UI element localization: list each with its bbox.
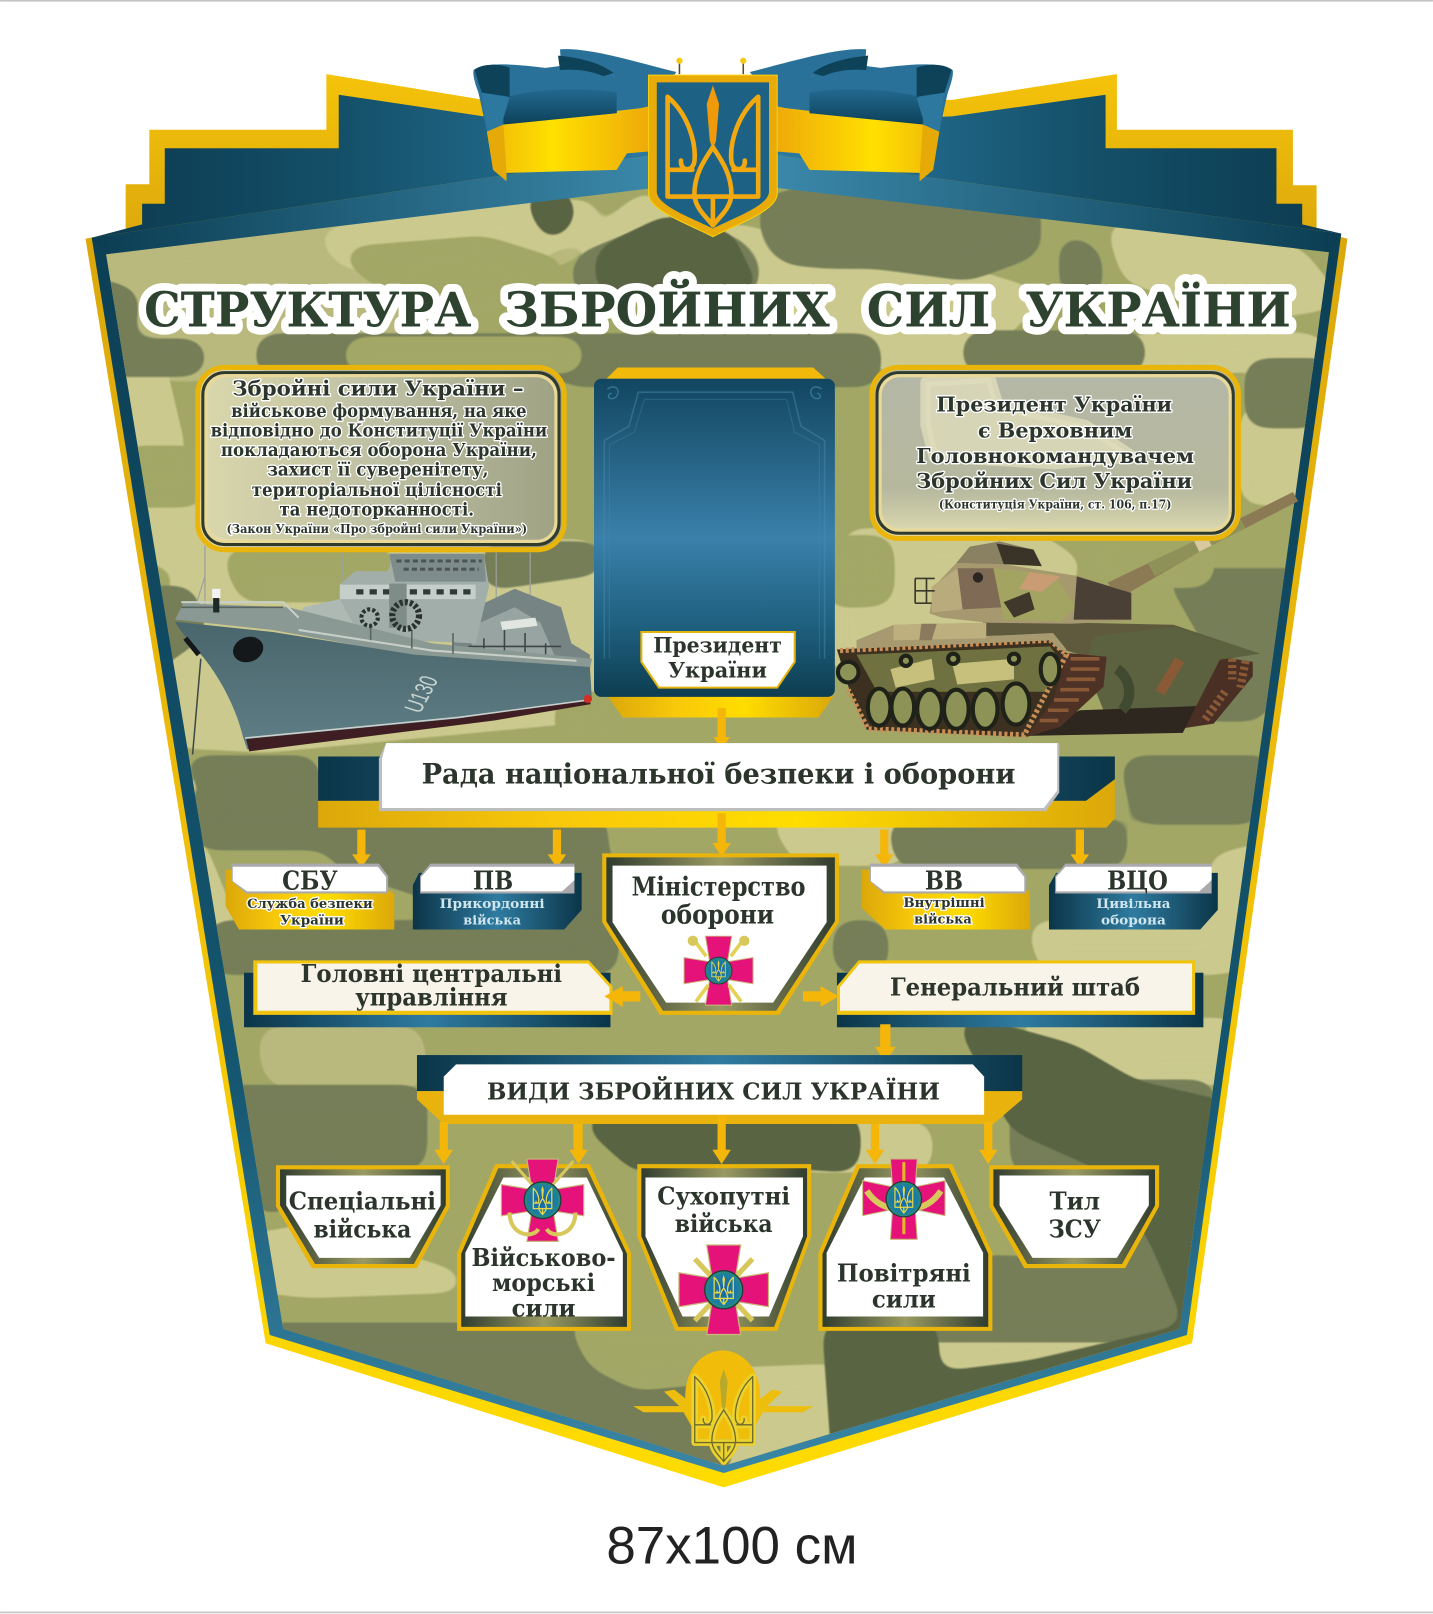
box: air force: Повітряні — [837, 1259, 971, 1288]
panel: president is commander in chief: є Верховним — [978, 418, 1132, 442]
ship main superstructure — [340, 554, 489, 643]
panel: armed forces definition: та недоторканності. — [280, 501, 474, 521]
title — [144, 279, 1291, 338]
box: ВЦО — [1049, 864, 1218, 929]
box: ВВ: Внутрішні — [903, 895, 985, 911]
icon: land forces cross — [679, 1245, 768, 1335]
tank cupola — [956, 541, 1042, 566]
shield of arms — [649, 75, 777, 237]
tank photo — [837, 492, 1298, 737]
council banner: Рада національної безпеки і оборони — [422, 757, 1016, 790]
panel: armed forces definition: (Закон України «Про збройні сили України») — [227, 522, 527, 536]
camouflage field — [88, 175, 1349, 1482]
banner: branches of the armed forces — [417, 1055, 1022, 1124]
box: logistics: Тил — [1049, 1186, 1100, 1215]
title: ЗБРОЙНИХ — [504, 279, 830, 338]
box: main central directorates — [244, 959, 613, 1027]
box: land forces: війська — [675, 1209, 773, 1238]
ship waterline — [246, 700, 591, 751]
panel: president — [594, 367, 835, 717]
panel: president is commander in chief: Президент України — [936, 393, 1172, 417]
tank wheels — [838, 654, 1059, 729]
ship deck — [175, 603, 592, 669]
panel: president is commander in chief — [872, 367, 1238, 538]
box: special forces — [276, 1165, 450, 1268]
icon: ministry cross — [684, 936, 753, 1005]
panel gold top — [606, 367, 826, 379]
box: general staff: Генеральний штаб — [890, 972, 1140, 1001]
box: ВЦО: оборона — [1101, 912, 1166, 928]
box: ministry of defence: Міністерство — [632, 873, 806, 903]
box: ВЦО: Цивільна — [1096, 896, 1171, 912]
council banner — [318, 743, 1115, 828]
finials — [679, 62, 743, 74]
panel: armed forces definition: покладаються оборона України, — [221, 441, 537, 461]
header fold strip right — [772, 154, 1341, 252]
arrow: ministry to general staff — [803, 986, 839, 1007]
box: special forces: Спеціальні — [289, 1186, 436, 1215]
arrows to branches — [434, 1116, 998, 1164]
arrow: ministry to directorates — [604, 986, 640, 1007]
tank turret — [930, 563, 1131, 624]
shield board — [86, 74, 1349, 1487]
box: air force: сили — [872, 1284, 936, 1313]
box: ПВ: війська — [463, 912, 521, 928]
panel: president is commander in chief: Збройних Сил України — [916, 469, 1192, 493]
box: navy: сили — [512, 1294, 575, 1323]
left ribbon — [473, 49, 676, 181]
header stepped band left — [92, 95, 659, 238]
title: УКРАЇНИ — [1025, 282, 1291, 338]
tank barrel — [1108, 492, 1298, 599]
panel: armed forces definition: захист її суверенітету, — [267, 461, 489, 481]
box: general staff — [837, 960, 1203, 1027]
icon: navy cross — [501, 1159, 584, 1241]
box: land forces: Сухопутні — [657, 1181, 790, 1210]
tank mantlet — [1074, 576, 1131, 620]
box: ВВ: війська — [914, 911, 972, 927]
box: navy: морські — [492, 1268, 595, 1297]
tank front track — [837, 640, 1066, 737]
panel: armed forces definition: територіальної цілісності — [252, 481, 502, 501]
ship photo — [175, 546, 592, 755]
trident — [668, 85, 758, 225]
box: main central directorates: Головні центральні — [301, 959, 562, 988]
icon: air force cross — [863, 1159, 945, 1239]
box: СБУ: СБУ — [282, 866, 338, 896]
header fold strip left — [92, 154, 659, 254]
tank rear track — [1153, 657, 1253, 733]
box: special forces: війська — [314, 1214, 411, 1243]
box: ВВ — [862, 864, 1030, 929]
title: СТРУКТУРА — [144, 283, 472, 338]
title: СИЛ — [867, 283, 990, 338]
tank middle track — [1026, 653, 1107, 737]
box: ministry of defence: оборони — [661, 900, 774, 930]
box: ПВ — [413, 864, 582, 929]
box: navy — [457, 1159, 631, 1331]
panel: president is commander in chief: (Конституція України, ст. 106, п.17) — [939, 497, 1171, 511]
box: СБУ: України — [280, 912, 344, 928]
ship hull — [175, 622, 592, 749]
president label — [641, 632, 795, 688]
teal border of shield — [92, 154, 1341, 1473]
tank rear hull — [1086, 627, 1260, 710]
panel: president is commander in chief: Головнокомандувачем — [916, 444, 1194, 468]
box: СБУ: Служба безпеки — [247, 896, 373, 912]
box: logistics — [989, 1165, 1159, 1268]
panel: president: України — [668, 658, 767, 683]
tank deck — [983, 621, 1260, 660]
panel: armed forces definition: відповідно до Конституції України — [211, 421, 547, 441]
gold outline of shield — [86, 74, 1347, 1487]
box: СБУ — [226, 864, 394, 929]
header stepped band right — [772, 95, 1341, 234]
arrow: president to council — [713, 708, 730, 749]
panel: armed forces definition — [198, 367, 564, 550]
box: ПВ: ПВ — [473, 866, 513, 896]
right ribbon — [750, 49, 953, 181]
ship rear superstructure — [453, 589, 590, 669]
box: navy: Військово- — [472, 1243, 616, 1272]
panel: armed forces definition: Збройні сили України – — [232, 376, 523, 400]
box: ВВ: ВВ — [925, 866, 963, 896]
box: logistics: ЗСУ — [1048, 1214, 1101, 1243]
flag ribbons and coat of arms — [473, 49, 953, 237]
arrows from council — [352, 813, 1089, 868]
box: air force — [818, 1159, 992, 1331]
panel: president: Президент — [653, 634, 782, 659]
box: land forces — [637, 1164, 811, 1335]
box: ПВ: Прикордонні — [440, 896, 545, 912]
panel: armed forces definition: військове формування, на яке — [231, 402, 527, 422]
box: ВЦО: ВЦО — [1107, 866, 1168, 896]
box: main central directorates: управління — [355, 983, 508, 1012]
ship hull number: U130 — [399, 673, 444, 716]
box: ministry of defence — [602, 853, 839, 1015]
banner: branches of the armed forces: ВИДИ ЗБРОЙНИХ СИЛ УКРАЇНИ — [487, 1074, 940, 1105]
arrow: general staff to branches — [875, 1024, 896, 1062]
size caption: 87x100 см — [606, 1517, 858, 1576]
panel gold bottom — [607, 696, 834, 717]
icon: airborne emblem — [633, 1350, 813, 1462]
tank fender — [856, 623, 1066, 651]
